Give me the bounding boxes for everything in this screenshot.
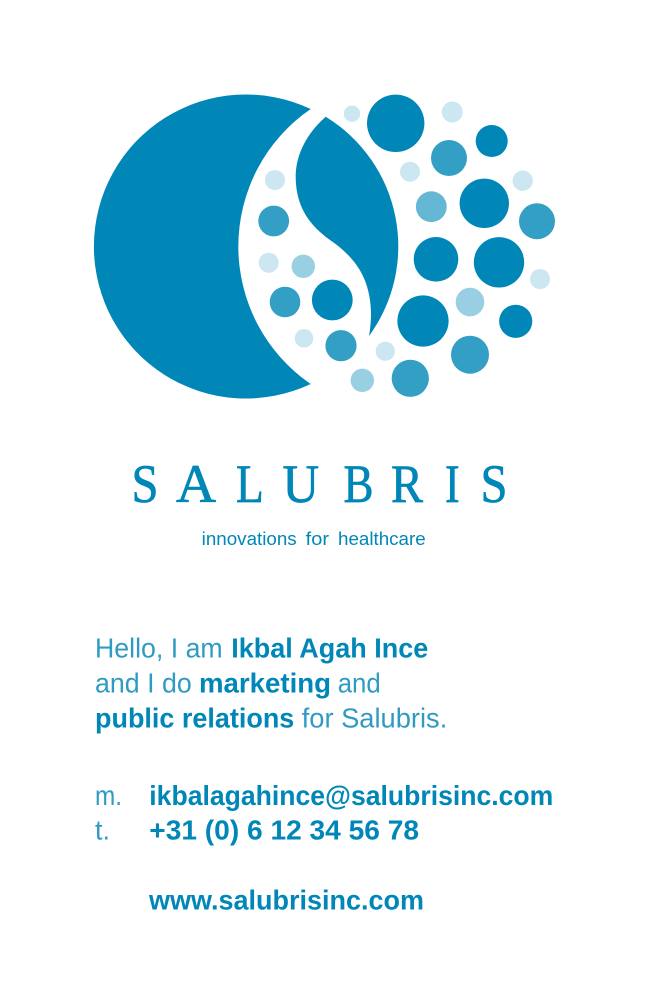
email: ikbalagahince@salubrisinc.com bbox=[149, 780, 553, 811]
introduction text: for Salubris. bbox=[302, 702, 447, 734]
teardrop bbox=[296, 117, 398, 336]
introduction text: marketing bbox=[199, 668, 331, 699]
introduction text: and bbox=[338, 668, 381, 699]
crescent bbox=[94, 94, 311, 398]
tagline bbox=[202, 529, 426, 549]
tagline: innovations bbox=[202, 529, 297, 549]
logo bbox=[94, 94, 555, 398]
introduction text bbox=[95, 632, 447, 734]
email: m. bbox=[95, 780, 122, 811]
brand name: L bbox=[236, 454, 264, 514]
phone: t. bbox=[95, 814, 110, 846]
brand name: A bbox=[176, 454, 216, 514]
brand name: I bbox=[445, 454, 460, 514]
phone: +31 (0) 6 12 34 56 78 bbox=[149, 814, 419, 846]
contact details bbox=[95, 780, 553, 916]
brand name: B bbox=[344, 454, 374, 514]
tagline: healthcare bbox=[338, 529, 426, 549]
website: www.salubrisinc.com bbox=[148, 884, 424, 916]
brand name: S bbox=[480, 454, 508, 514]
introduction text: public relations bbox=[95, 702, 294, 734]
brand name: U bbox=[282, 454, 319, 514]
introduction text: and I do bbox=[95, 668, 192, 699]
brand name: R bbox=[391, 454, 423, 514]
dots bbox=[258, 95, 555, 397]
introduction text: Ikbal Agah Ince bbox=[231, 632, 428, 664]
brand name: S bbox=[132, 454, 158, 514]
introduction text: Hello, I am bbox=[95, 632, 223, 664]
tagline: for bbox=[306, 529, 329, 549]
